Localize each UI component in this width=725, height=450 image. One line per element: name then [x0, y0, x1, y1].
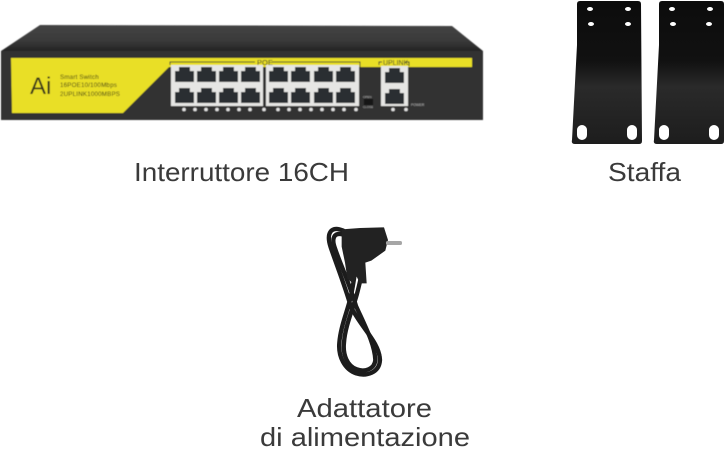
plug pin [386, 241, 402, 245]
power cord [329, 227, 402, 374]
mounting bracket left [572, 1, 642, 144]
status LEDs [182, 108, 408, 111]
mode switch: OPEN [363, 95, 372, 99]
switch caption: Interruttore 16CH [134, 157, 349, 187]
POE port group left [171, 65, 263, 106]
power label: POWER [411, 103, 425, 107]
model text: Smart Switch [60, 74, 99, 81]
model text: 2UPLINK1000MBPS [60, 91, 120, 98]
plug body [342, 227, 388, 283]
mode switch [363, 95, 373, 109]
POE bracket label: POE [257, 58, 273, 67]
model text [60, 74, 120, 98]
model text: 16POE10/100Mbps [60, 82, 117, 89]
yellow label band [11, 58, 472, 113]
brand logo: Ai [30, 73, 51, 100]
uplink bracket label: UPLINK [383, 60, 409, 67]
mounting bracket right [654, 1, 724, 144]
cord cables [329, 229, 380, 374]
POE port group right [266, 65, 359, 106]
uplink ports [381, 66, 408, 106]
mode switch: CLOSE [363, 105, 373, 109]
bracket caption: Staffa [608, 157, 682, 187]
POE bracket label [170, 58, 360, 67]
cord caption [260, 393, 470, 450]
switch top face [1, 25, 483, 51]
cord caption: Adattatore [297, 393, 432, 423]
network switch [1, 25, 483, 120]
switch front face [1, 51, 483, 120]
